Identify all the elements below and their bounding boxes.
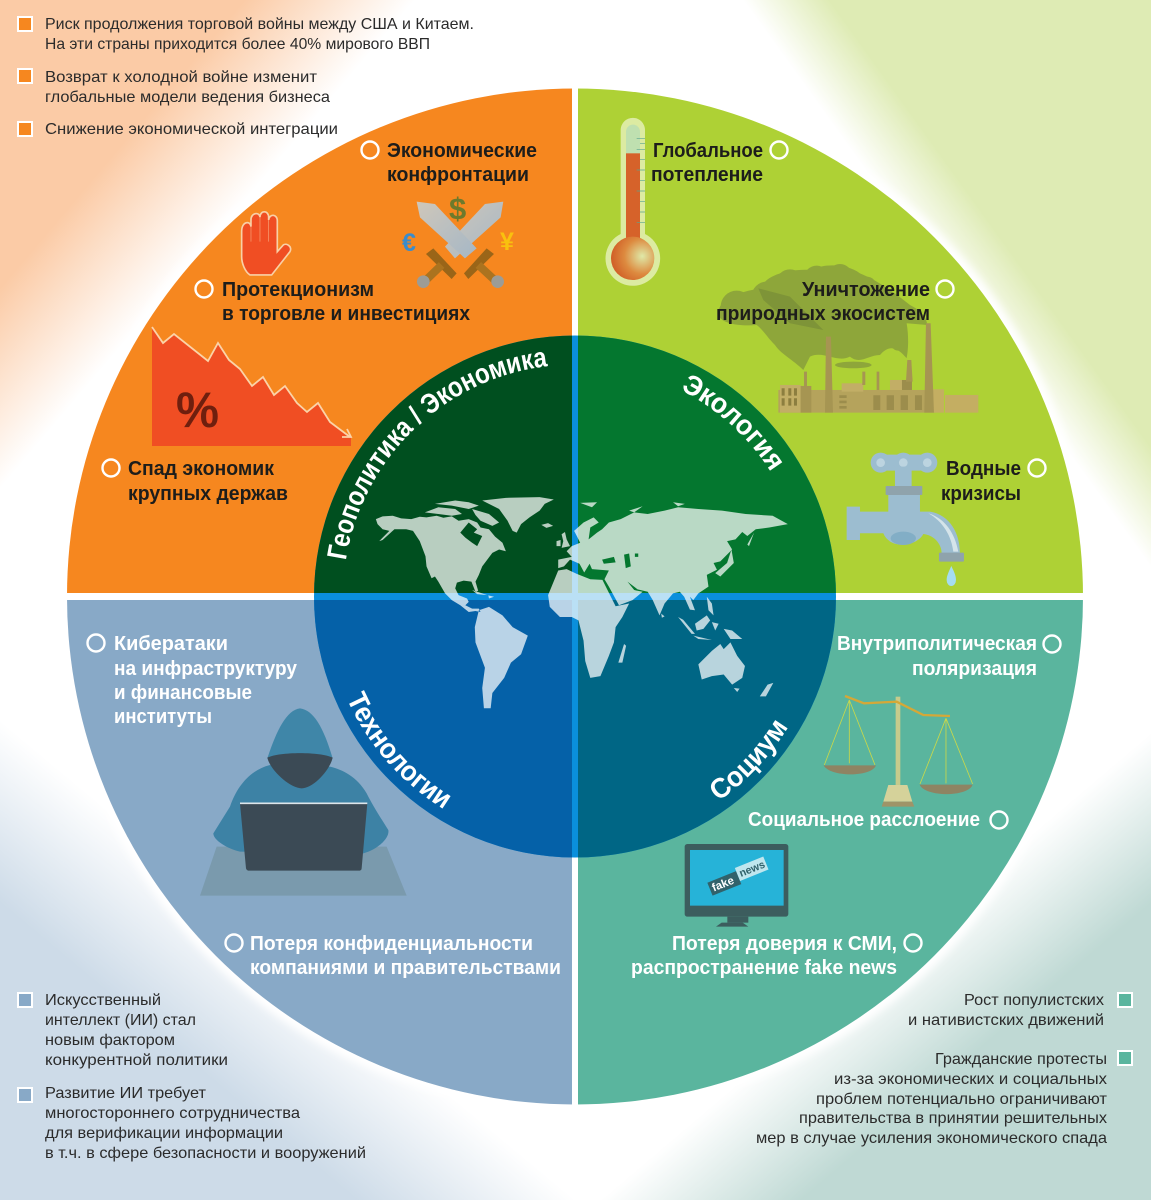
icon: unbalanced scales [824, 696, 973, 807]
icon: thermometer [605, 118, 660, 286]
label: protectionism: в торговле и инвестициях [222, 303, 470, 325]
label: protectionism: Протекционизм [222, 279, 374, 301]
world map [376, 497, 788, 708]
icon: stop hand [242, 212, 291, 275]
label: cyberattacks: Кибератаки [114, 633, 228, 655]
icon: crossed swords with currencies [402, 191, 514, 288]
text block: geopolitics notes: глобальные модели ведения бизнеса [45, 89, 330, 106]
label: water crises: кризисы [941, 483, 1021, 505]
label: loss of privacy [226, 933, 561, 979]
text block: technology notes: Развитие ИИ требует [45, 1085, 207, 1102]
label: domestic polarization: поляризация [912, 658, 1037, 680]
icon: crossed swords with currencies: ¥ [500, 228, 514, 256]
label: domestic polarization: Внутриполитическая [837, 633, 1037, 655]
label: water crises: Водные [946, 458, 1021, 480]
text block: society notes: из-за экономических и социальных [834, 1071, 1107, 1088]
label: loss of media trust: Потеря доверия к СМИ, [672, 933, 897, 955]
icon: water tap [847, 453, 964, 586]
icon: monitor with fake news: news [738, 859, 767, 880]
label: global warming [651, 140, 788, 186]
icon: monitor with fake news [685, 844, 788, 927]
text block: technology notes: в т.ч. в сфере безопасности и вооружений [45, 1145, 366, 1162]
text block: geopolitics notes: Риск продолжения торговой войны между США и Китаем. [45, 16, 474, 33]
text block: society notes: Гражданские протесты [935, 1051, 1107, 1068]
label: loss of privacy: Потеря конфиденциальности [250, 933, 533, 955]
label: ecosystem destruction: Уничтожение [802, 279, 930, 301]
text block: technology notes: многостороннего сотрудничества [45, 1105, 300, 1122]
text block: technology notes: Искусственный [45, 992, 161, 1009]
text block: society notes [756, 992, 1132, 1147]
label: water crises [941, 458, 1046, 505]
label: loss of media trust: распространение fake news [631, 957, 897, 979]
label: cyberattacks [88, 633, 298, 728]
text block: technology notes: новым фактором [45, 1032, 175, 1049]
panel: ecology quadrant [578, 80, 1090, 593]
label: major economies slowdown: крупных держав [128, 483, 288, 505]
text block: geopolitics notes: Возврат к холодной войне изменит [45, 69, 318, 86]
text block: geopolitics notes: На эти страны приходится более 40% мирового ВВП [45, 36, 430, 53]
label: economic confrontations: конфронтации [387, 164, 529, 186]
curved heading: society: Социум [710, 720, 788, 798]
icon: factory with smoke [718, 264, 978, 413]
text block: geopolitics notes [18, 16, 474, 138]
text block: society notes: проблем потенциально ограничивают [816, 1091, 1108, 1108]
text block: technology notes [18, 992, 366, 1162]
label: economic confrontations [362, 140, 537, 186]
label: loss of media trust [631, 933, 922, 979]
text block: society notes: мер в случае усиления экономического спада [756, 1130, 1107, 1147]
icon: falling chart with percent [152, 327, 351, 446]
label: ecosystem destruction: природных экосистем [716, 303, 930, 325]
icon: hacker at laptop [200, 708, 407, 896]
curved heading: geopolitics / economy: Геополитика / Экономика [327, 352, 548, 559]
panel: geopolitics / economy quadrant [60, 80, 572, 593]
label: cyberattacks: и финансовые [114, 682, 252, 704]
text block: technology notes: конкурентной политики [45, 1052, 228, 1069]
curved heading: ecology: Экология [684, 376, 782, 471]
central globe circle [310, 330, 840, 863]
panel: society quadrant [578, 600, 1090, 1113]
label: protectionism [196, 279, 470, 325]
label: cyberattacks: институты [114, 706, 212, 728]
panel: technology quadrant [60, 600, 572, 1113]
text block: society notes: и нативистских движений [908, 1012, 1104, 1029]
label: economic confrontations: Экономические [387, 140, 537, 162]
label: loss of privacy: компаниями и правительствами [250, 957, 561, 979]
label: domestic polarization [837, 633, 1060, 680]
text block: society notes: правительства в принятии решительных [799, 1110, 1107, 1127]
label: social stratification: Социальное расслоение [748, 809, 980, 831]
label: global warming: Глобальное [653, 140, 763, 162]
label: major economies slowdown [102, 458, 288, 505]
label: ecosystem destruction [716, 279, 954, 325]
icon: crossed swords with currencies: $ [449, 191, 466, 226]
text block: society notes: Рост популистских [964, 992, 1104, 1009]
label: global warming: потепление [651, 164, 763, 186]
label: cyberattacks: на инфраструктуру [114, 658, 298, 680]
icon: monitor with fake news: fake [710, 875, 736, 894]
label: major economies slowdown: Спад экономик [128, 458, 275, 480]
text block: technology notes: интеллект (ИИ) стал [45, 1012, 196, 1029]
text block: technology notes: для верификации информации [45, 1125, 283, 1142]
curved heading: technology: Технологии [349, 690, 450, 808]
text block: geopolitics notes: Снижение экономической интеграции [45, 121, 338, 138]
icon: crossed swords with currencies: € [402, 229, 416, 257]
icon: falling chart with percent: % [176, 382, 219, 438]
